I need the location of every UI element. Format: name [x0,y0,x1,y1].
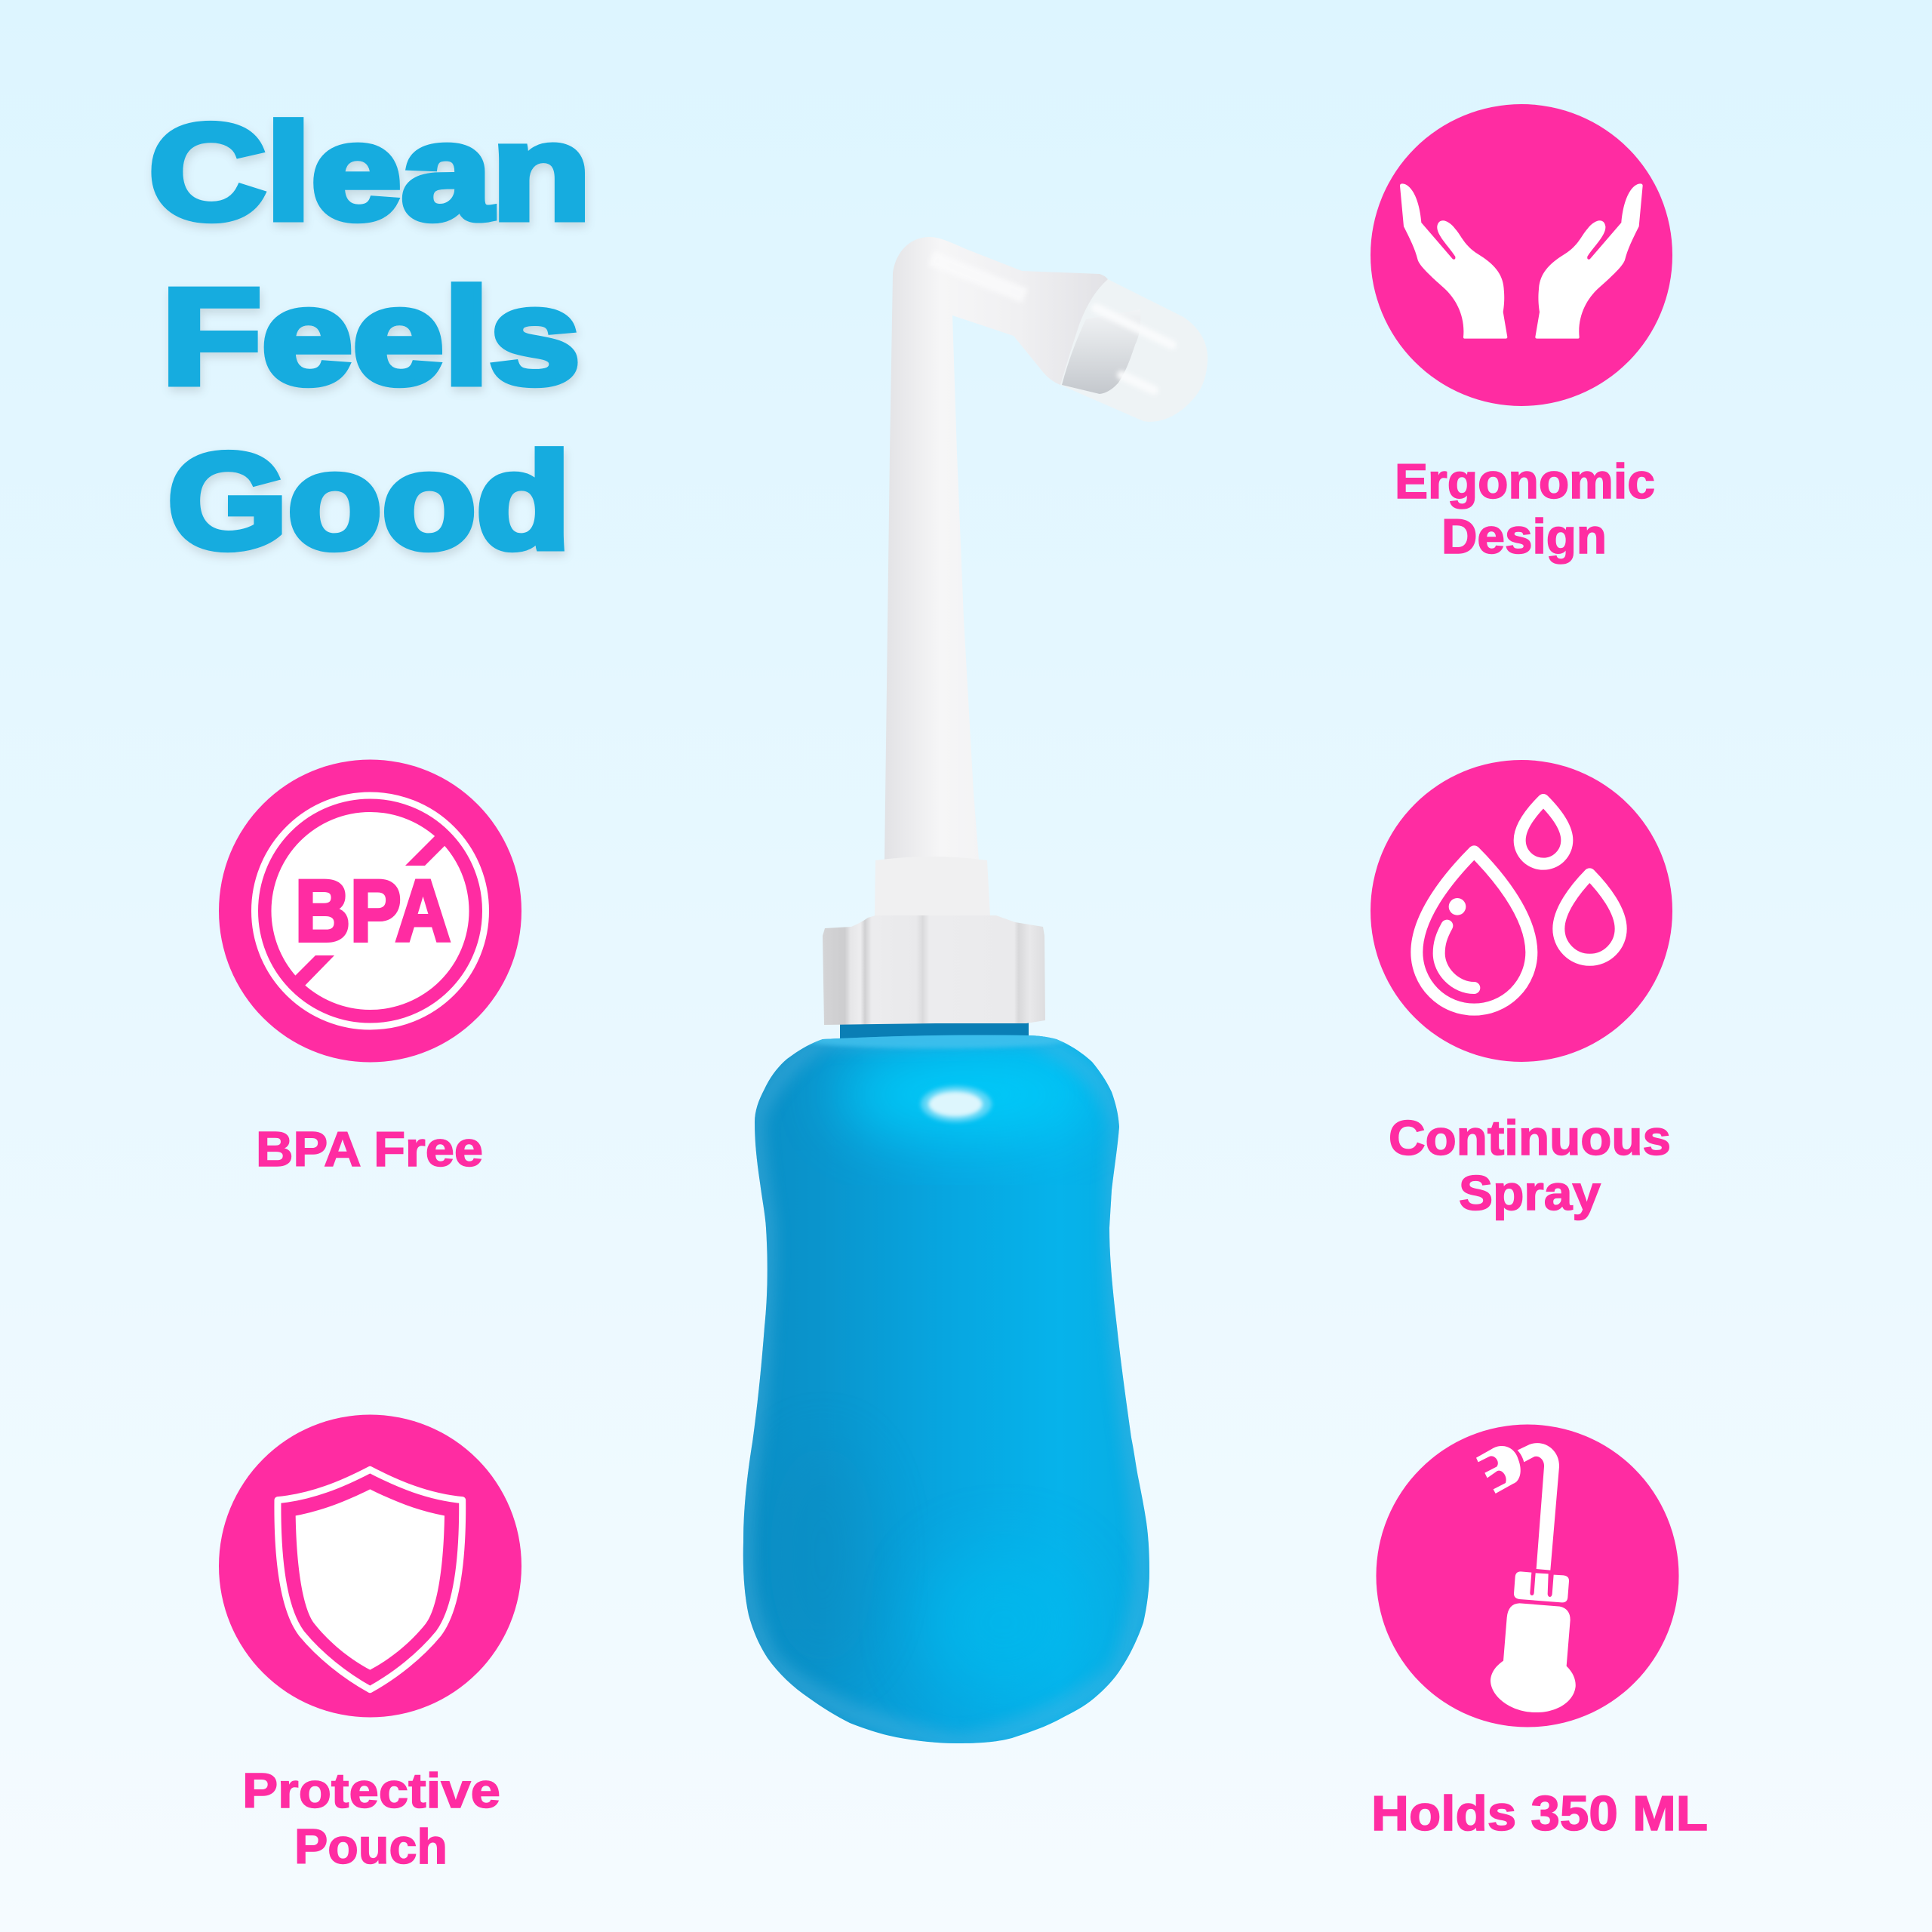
panel: bpa free [219,759,521,1177]
icon: bottle silhouette [1377,1425,1678,1727]
label: Continuous Spray: Continuous [1389,1110,1671,1165]
title line: Clean: Clean [149,97,591,248]
bottle neck [840,1019,1029,1041]
panel: holds 350 ml [1371,1425,1708,1841]
stem highlight [931,258,1025,296]
label: Protective Pouch [242,1763,500,1874]
label: Protective Pouch: Pouch [294,1819,448,1874]
icon: hands [1371,104,1672,406]
icon: no BPA: BPA [295,863,451,960]
panel: continuous spray [1371,760,1672,1220]
label: Continuous Spray [1389,1110,1671,1220]
label: Ergonomic Design [1395,454,1655,564]
label: Holds 350 ML: Holds 350 ML [1371,1786,1708,1841]
label: Ergonomic Design: Ergonomic [1395,454,1655,509]
icon: water drops [1371,760,1672,1062]
nozzle tip cover [1060,279,1208,422]
panel: protective pouch [219,1414,521,1874]
title line: Good: Good [168,426,571,577]
label: Continuous Spray: Spray [1459,1165,1601,1220]
icon: shield [219,1414,521,1718]
collar [875,857,990,916]
title [149,97,591,577]
product: bottle [743,237,1208,1743]
bottle highlight [921,1086,992,1122]
nozzle stem [884,237,1108,860]
screw cap [823,915,1045,1025]
title line: Feels: Feels [162,261,580,413]
bottle body [743,1029,1149,1743]
icon: no BPA [219,759,521,1063]
label: BPA Free: BPA Free [256,1121,483,1177]
label: Ergonomic Design: Design [1441,509,1607,564]
panel: ergonomic design [1371,104,1672,564]
label: Protective Pouch: Protective [242,1763,500,1818]
